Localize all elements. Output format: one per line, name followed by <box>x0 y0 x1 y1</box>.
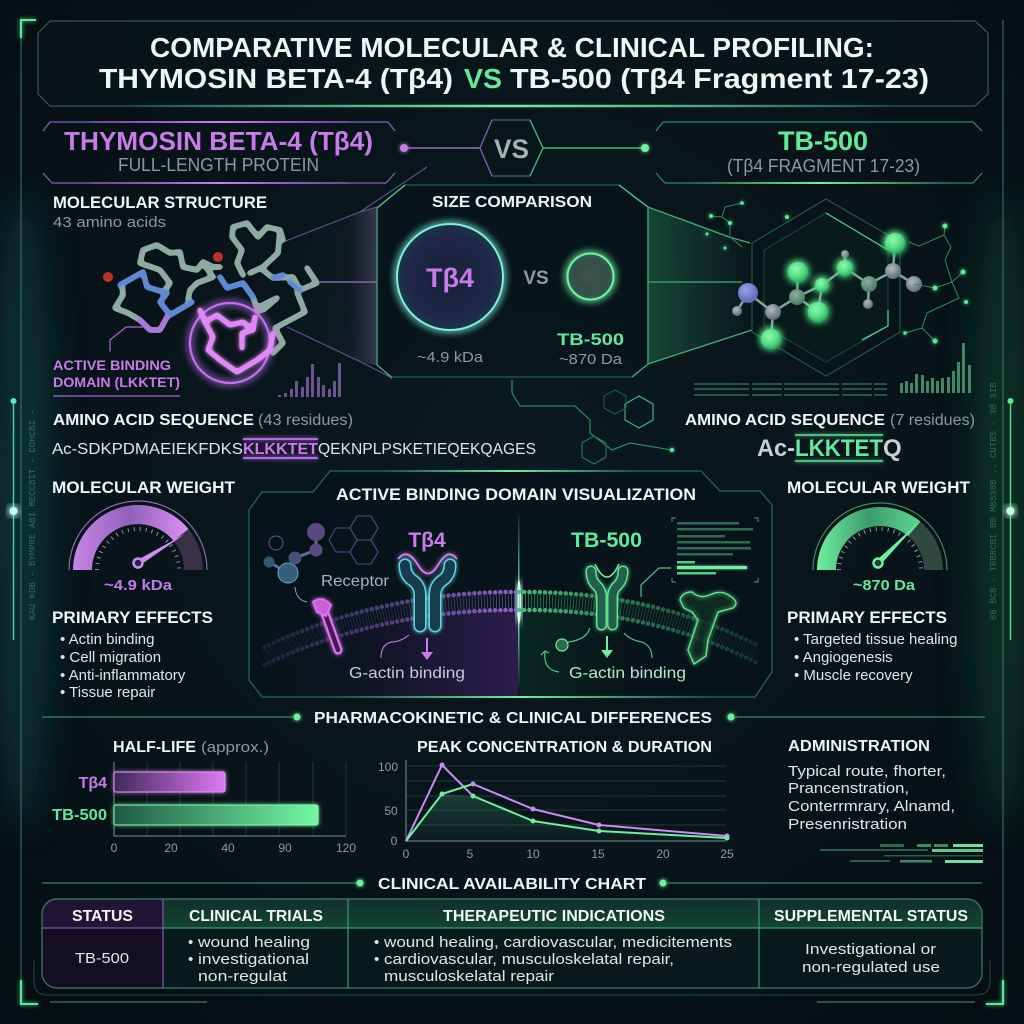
table header: STATUS <box>72 908 133 925</box>
section heading: clinical availability chart: CLINICAL AVAILABILITY CHART <box>378 876 646 893</box>
half-life bar chart: 20 <box>164 841 178 855</box>
half-life bar chart: Tβ4 <box>79 775 107 792</box>
connector fan: right <box>648 207 752 364</box>
active binding domain label: ACTIVE BINDING <box>53 357 171 373</box>
primary effects: tb-500: • Angiogenesis <box>794 649 893 666</box>
vs badge: VS <box>494 134 529 164</box>
table row <box>75 934 940 985</box>
amino acid sequence: thymosin beta-4 <box>52 412 536 458</box>
membrane protein: pink rod <box>313 599 338 650</box>
table header <box>72 908 968 925</box>
half-life bar chart: 0 <box>111 841 118 855</box>
active binding domain label: DOMAIN (LKKTET) <box>53 374 180 390</box>
molecular weight gauge: thymosin beta-4: ~4.9 kDa <box>104 577 173 594</box>
administration <box>788 738 983 863</box>
panel: size comparison: SIZE COMPARISON <box>432 194 592 211</box>
protein structure <box>103 223 317 383</box>
amino acid sequence: tb-500: Q <box>883 435 902 462</box>
title: VS <box>464 63 502 94</box>
panel: size comparison: Tβ4 <box>426 263 474 293</box>
half-life bar chart: TB-500 <box>52 807 107 824</box>
title: TB-500 (Tβ4 Fragment 17-23) <box>510 63 929 94</box>
peak concentration line chart: PEAK CONCENTRATION & DURATION <box>417 739 712 756</box>
half-life bar chart: 40 <box>221 841 235 855</box>
table header: THERAPEUTIC INDICATIONS <box>443 908 665 925</box>
amino acid sequence: tb-500: (7 residues) <box>890 412 975 429</box>
active binding domain label <box>53 357 180 396</box>
primary effects: thymosin beta-4 <box>52 609 213 701</box>
decorative data lines and bars: right <box>694 343 971 395</box>
panel: active binding domain visualization: ACTIVE BINDING DOMAIN VISUALIZATION <box>336 486 696 504</box>
banner: tb-500 <box>656 122 982 184</box>
connector fan: left <box>283 167 427 378</box>
section heading: pharmacokinetic and clinical differences <box>42 710 985 727</box>
table row: investigational <box>198 951 309 968</box>
cell membrane <box>264 592 757 665</box>
banner: tb-500: (Tβ4 FRAGMENT 17-23) <box>727 156 920 176</box>
peak concentration line chart: 15 <box>591 847 605 861</box>
amino acid sequence: thymosin beta-4: KLKKTET <box>243 441 318 458</box>
half-life bar chart: 90 <box>278 841 292 855</box>
table row: non-regulat <box>198 968 288 985</box>
table row: wound healing <box>197 934 310 951</box>
right side decoration <box>989 382 1014 640</box>
receptor: tβ4 <box>349 529 465 682</box>
right side decoration: 86 BCB - TBBRCBI BB MBS38B .. CUTBS - 3B 3IB <box>989 382 999 620</box>
peak concentration line chart: 5 <box>467 847 474 861</box>
amino acid sequence: tb-500 <box>685 412 975 462</box>
primary effects: thymosin beta-4: • Anti-inflammatory <box>60 667 186 684</box>
molecular weight gauge: tb-500 <box>787 479 970 594</box>
molecular structure heading: MOLECULAR STRUCTURE <box>53 193 267 212</box>
banner: thymosin beta-4: THYMOSIN BETA-4 (Tβ4) <box>64 126 373 156</box>
administration: Typical route, fhorter, <box>788 763 946 780</box>
panel: size comparison: TB-500 <box>557 330 624 349</box>
vs badge <box>400 120 649 176</box>
table row: • <box>374 934 379 951</box>
peak concentration line chart: 20 <box>656 847 670 861</box>
half-life bar chart <box>52 739 356 855</box>
table row: Investigational or <box>805 941 936 958</box>
peak concentration line chart: 25 <box>720 847 734 861</box>
panel: active binding domain visualization <box>249 470 772 698</box>
peak concentration line chart: 50 <box>384 804 398 818</box>
receptor: tb-500: TB-500 <box>571 529 642 552</box>
title <box>38 21 988 107</box>
receptor: tb-500 <box>541 529 686 682</box>
primary effects: tb-500 <box>787 609 957 684</box>
amino acid sequence: thymosin beta-4: (43 residues) <box>258 412 353 429</box>
peak concentration line chart: 0 <box>391 834 398 848</box>
hexagon molecule: tb-500 <box>732 199 922 376</box>
table header: CLINICAL TRIALS <box>189 908 323 925</box>
left side decoration: KAU KDB - BYMPRE ABI MECCBIT - COHCBI - <box>28 409 38 620</box>
table row: • <box>374 951 379 968</box>
title: THYMOSIN BETA-4 (Tβ4) <box>99 63 453 94</box>
table row: • <box>188 934 193 951</box>
peak concentration line chart: 100 <box>378 760 398 774</box>
peak concentration line chart: 0 <box>403 847 410 861</box>
panel: size comparison: ~4.9 kDa <box>417 349 484 366</box>
receptor molecule cluster: Receptor <box>321 573 390 590</box>
half-life bar chart: (approx.) <box>201 739 269 756</box>
network lines: tb-500 <box>706 201 968 344</box>
table row: cardiovascular, musculoskelatal repair, <box>384 951 674 968</box>
hexagon connector network <box>512 380 674 464</box>
section heading: clinical availability chart <box>42 876 982 893</box>
half-life bar chart: HALF-LIFE <box>113 739 196 756</box>
peak concentration line chart: 10 <box>526 847 540 861</box>
amino acid sequence: tb-500: LKKTET <box>795 435 883 462</box>
primary effects: thymosin beta-4: • Actin binding <box>60 631 154 648</box>
banner: tb-500: TB-500 <box>778 126 868 156</box>
table row: musculoskelatal repair <box>384 968 554 985</box>
administration: Conterrmrary, Alnamd, <box>788 798 955 815</box>
administration: ADMINISTRATION <box>788 738 930 755</box>
receptor: tβ4: Tβ4 <box>408 529 446 552</box>
data readout panel <box>672 518 758 582</box>
molecular weight gauge: tb-500: MOLECULAR WEIGHT <box>787 479 970 497</box>
administration: Prancenstration, <box>788 780 909 797</box>
molecular weight gauge: thymosin beta-4: MOLECULAR WEIGHT <box>52 479 235 497</box>
panel: size comparison <box>377 185 648 378</box>
molecular structure heading <box>53 193 267 231</box>
title: COMPARATIVE MOLECULAR & CLINICAL PROFILING: <box>150 32 874 63</box>
table row: TB-500 <box>75 950 129 967</box>
primary effects: thymosin beta-4: • Cell migration <box>60 649 161 666</box>
molecular structure heading: 43 amino acids <box>53 214 166 231</box>
primary effects: thymosin beta-4: • Tissue repair <box>60 684 155 701</box>
primary effects: tb-500: PRIMARY EFFECTS <box>787 609 947 627</box>
molecular weight gauge: thymosin beta-4 <box>52 479 235 594</box>
amino acid sequence: thymosin beta-4: Ac-SDKPDMAEIEKFDKS <box>52 441 243 458</box>
receptor: tβ4: G-actin binding <box>349 665 465 682</box>
table row: wound healing, cardiovascular, medicitements <box>383 934 732 951</box>
membrane protein: green structure <box>680 592 736 664</box>
table header: SUPPLEMENTAL STATUS <box>774 908 968 925</box>
primary effects: tb-500: • Targeted tissue healing <box>794 631 957 648</box>
amino acid sequence: thymosin beta-4: AMINO ACID SEQUENCE <box>53 412 254 429</box>
panel: size comparison: ~870 Da <box>559 351 623 368</box>
receptor molecule cluster <box>264 516 390 602</box>
section heading: pharmacokinetic and clinical differences: PHARMACOKINETIC & CLINICAL DIFFERENCES <box>314 710 712 727</box>
half-life bar chart: 120 <box>336 841 356 855</box>
receptor: tb-500: G-actin binding <box>569 665 686 682</box>
amino acid sequence: thymosin beta-4: QEKNPLPSKETIEQEKQAGES <box>318 441 536 458</box>
banner: thymosin beta-4: FULL-LENGTH PROTEIN <box>118 155 319 175</box>
primary effects: thymosin beta-4: PRIMARY EFFECTS <box>52 609 213 627</box>
table row: • <box>188 951 193 968</box>
panel: size comparison: VS <box>523 268 549 289</box>
primary effects: tb-500: • Muscle recovery <box>794 667 913 684</box>
molecular weight gauge: tb-500: ~870 Da <box>853 577 916 594</box>
banner: thymosin beta-4 <box>43 121 395 184</box>
left side decoration <box>10 398 38 640</box>
administration: Presenristration <box>788 816 907 833</box>
amino acid sequence: tb-500: AMINO ACID SEQUENCE <box>685 412 885 429</box>
clinical availability table <box>34 899 990 995</box>
amino acid sequence: tb-500: Ac- <box>757 435 795 462</box>
table row: non-regulated use <box>802 959 940 976</box>
decorative bars: left <box>278 363 341 397</box>
peak concentration line chart <box>378 739 734 861</box>
